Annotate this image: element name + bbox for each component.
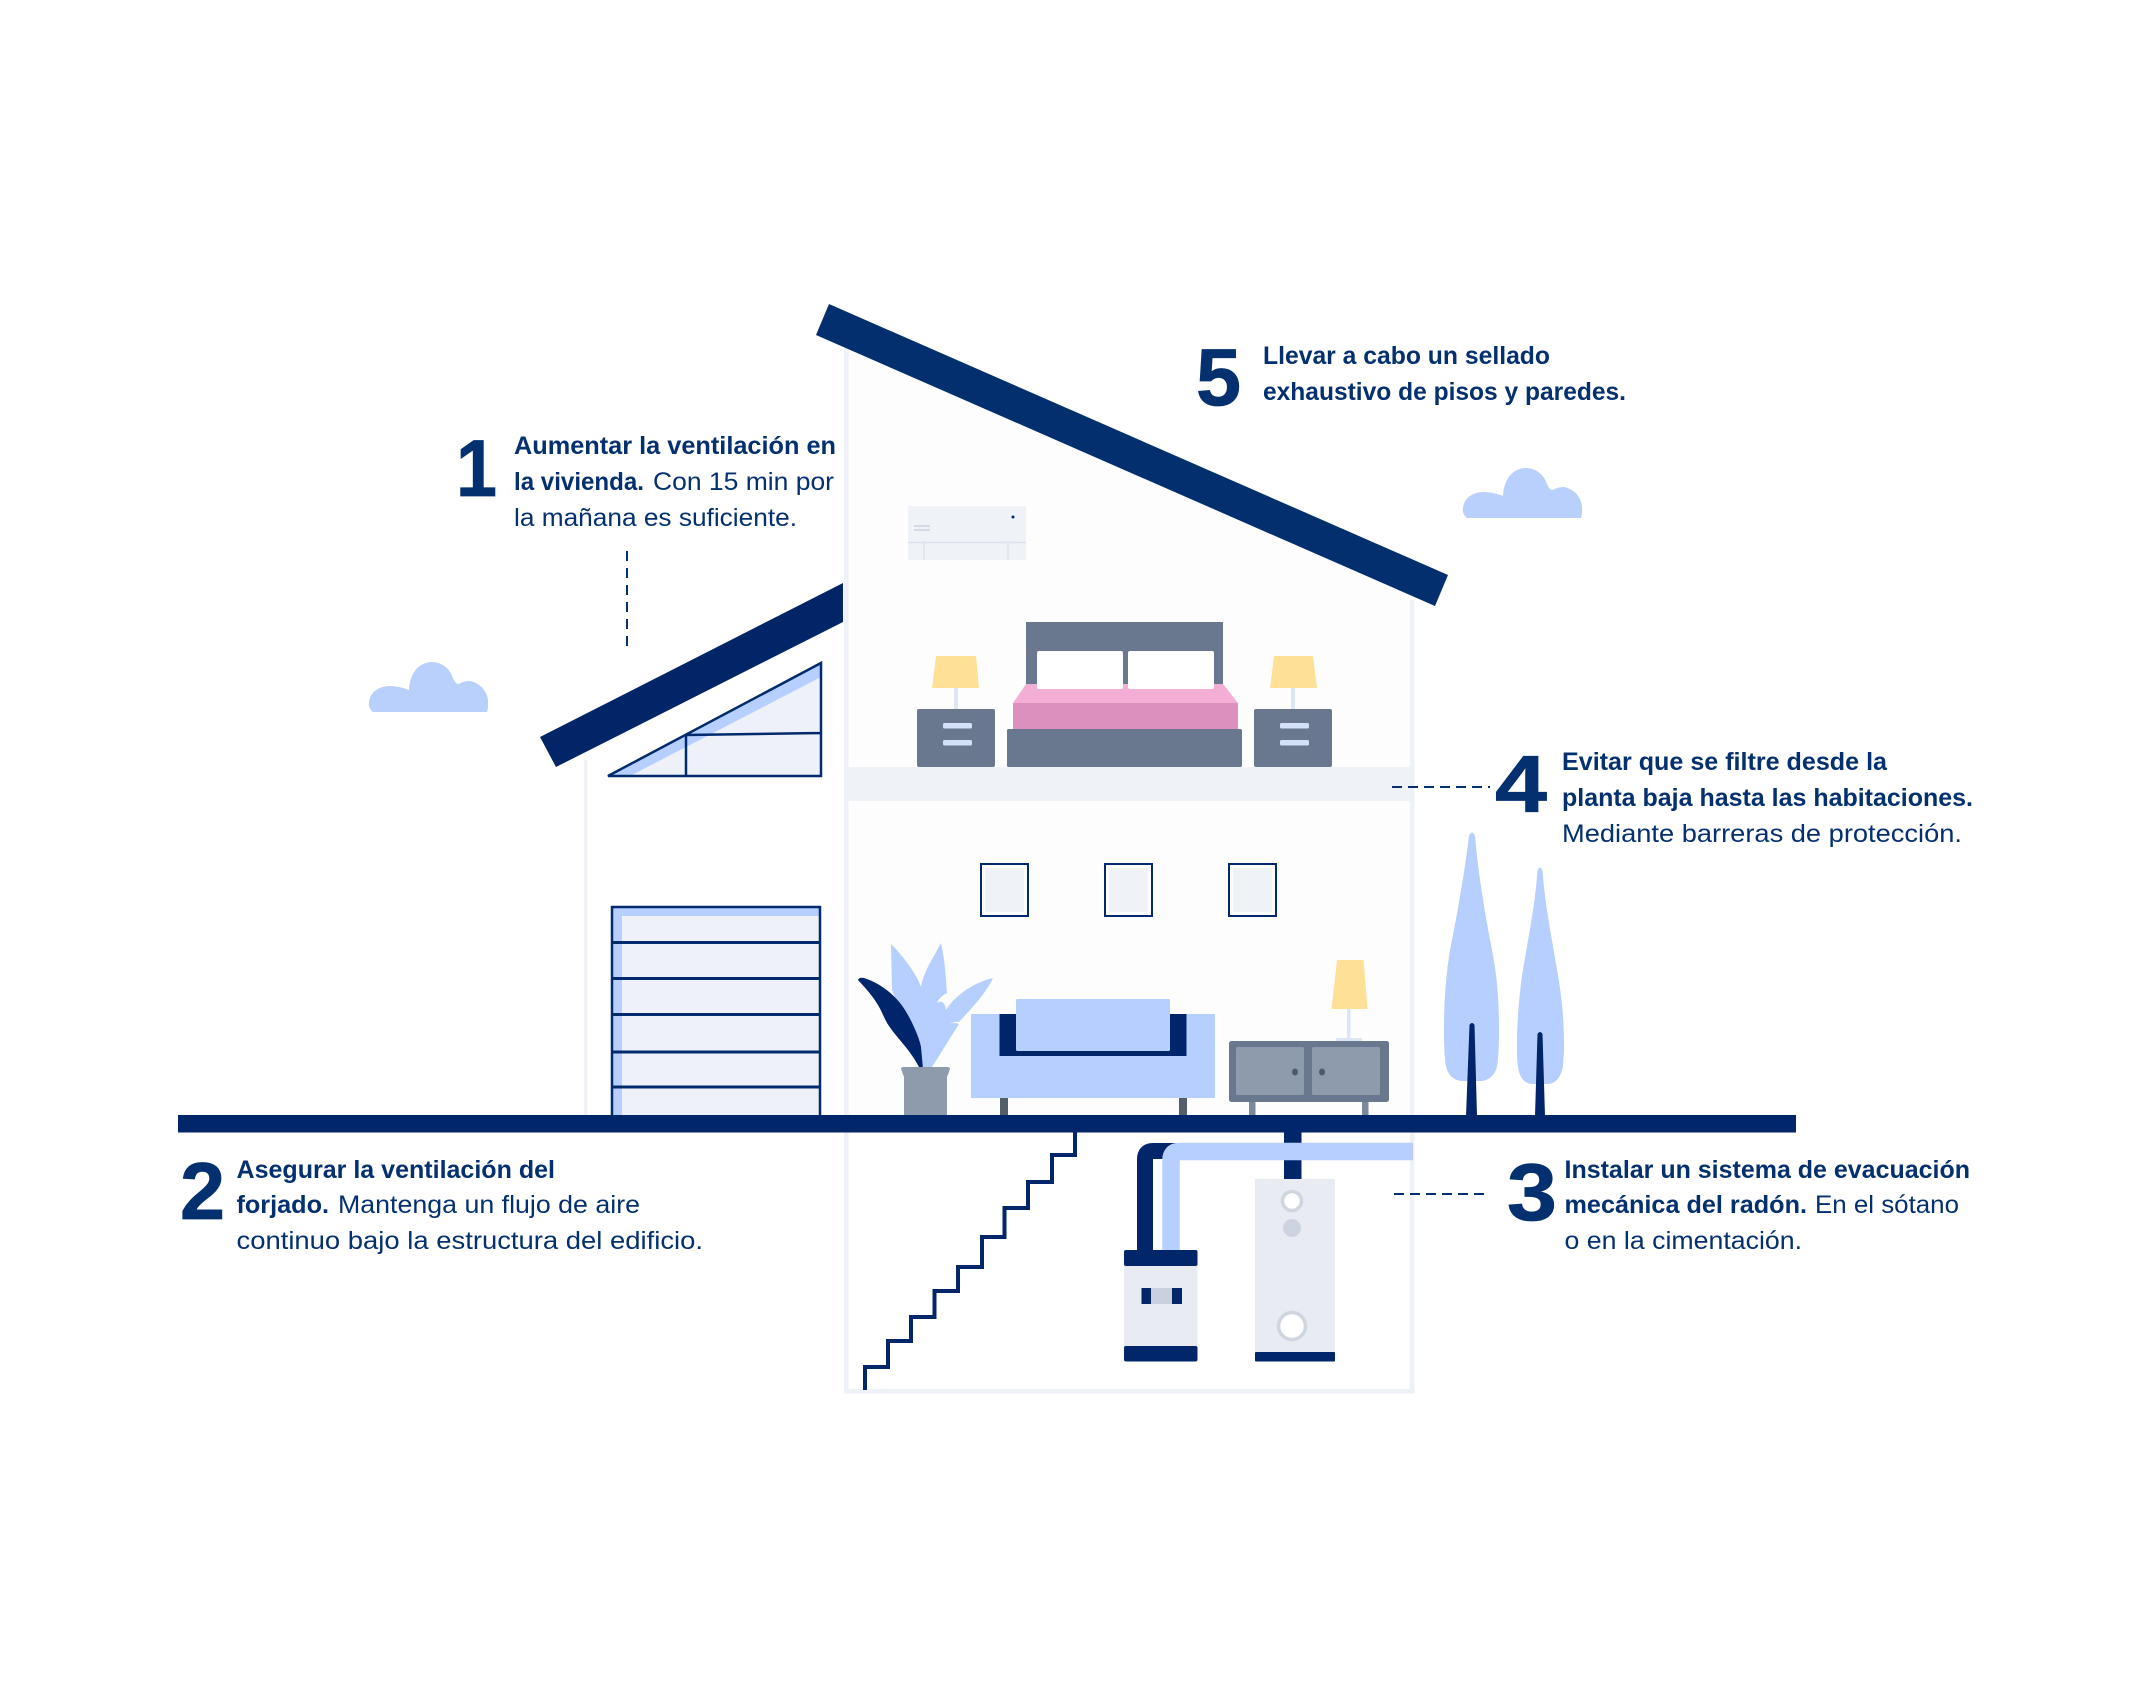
ground line bbox=[178, 1115, 1796, 1132]
sideboard with lamp bbox=[1229, 960, 1389, 1116]
garage door bbox=[611, 906, 821, 1116]
callout 1 bbox=[456, 424, 836, 532]
intermediate floor slab bbox=[848, 767, 1410, 801]
callout 4: 4 bbox=[1495, 740, 1547, 830]
right cloud bbox=[1463, 468, 1582, 518]
sofa bbox=[971, 999, 1215, 1116]
bed bbox=[1007, 622, 1242, 767]
house walls and interior bbox=[584, 345, 1414, 1394]
air conditioning unit bbox=[908, 506, 1026, 560]
wall picture 3 bbox=[1229, 864, 1276, 916]
callout 4: Evitar que se filtre desde la bbox=[1562, 748, 1888, 776]
callout 2: 2 bbox=[180, 1147, 225, 1237]
tree 1 bbox=[1444, 832, 1499, 1116]
dark exhaust stub pipe bbox=[1284, 1132, 1302, 1180]
basement stairs bbox=[865, 1132, 1075, 1390]
callout 5 bbox=[1196, 333, 1626, 423]
garage triangular window bbox=[608, 663, 821, 776]
left cloud bbox=[369, 662, 488, 712]
tree 2 bbox=[1517, 868, 1564, 1116]
callout 3 bbox=[1507, 1148, 1970, 1255]
water heater unit bbox=[1255, 1179, 1335, 1362]
callout 1: 1 bbox=[456, 424, 497, 514]
dashed leader line 4 bbox=[1392, 786, 1490, 788]
callout 5: Llevar a cabo un sellado bbox=[1263, 342, 1550, 370]
left nightstand and lamp bbox=[917, 656, 995, 767]
dashed leader line 1 bbox=[626, 551, 628, 652]
callout 3: En el sótano bbox=[1815, 1191, 1959, 1219]
callout 1: Aumentar la ventilación en bbox=[514, 432, 836, 460]
callout 1: Con 15 min por bbox=[653, 468, 834, 496]
main roof bbox=[816, 304, 1448, 606]
potted plant bbox=[858, 943, 993, 1115]
radon extraction unit bbox=[1124, 1250, 1198, 1362]
callout 1: la mañana es suficiente. bbox=[514, 504, 797, 532]
callout 2 bbox=[180, 1147, 703, 1255]
callout 3: Instalar un sistema de evacuación bbox=[1564, 1156, 1970, 1184]
callout 2: continuo bajo la estructura del edificio. bbox=[236, 1227, 703, 1255]
dashed leader line 3 bbox=[1394, 1193, 1490, 1195]
callout 4 bbox=[1495, 740, 1973, 848]
callout 5: exhaustivo de pisos y paredes. bbox=[1263, 378, 1626, 406]
callout 1: la vivienda. bbox=[514, 468, 644, 496]
callout 4: planta baja hasta las habitaciones. bbox=[1562, 784, 1973, 812]
dark radon pipe bbox=[1145, 1151, 1180, 1250]
callout 5: 5 bbox=[1196, 333, 1241, 423]
callout 3: mecánica del radón. bbox=[1564, 1191, 1807, 1219]
callout 2: forjado. bbox=[236, 1191, 329, 1219]
light air pipe bbox=[1171, 1152, 1413, 1250]
callout 3: o en la cimentación. bbox=[1564, 1227, 1802, 1255]
callout 4: Mediante barreras de protección. bbox=[1562, 820, 1962, 848]
callout 2: Mantenga un flujo de aire bbox=[338, 1191, 640, 1219]
callout 2: Asegurar la ventilación del bbox=[236, 1156, 555, 1184]
garage roof bbox=[540, 583, 843, 767]
wall picture 2 bbox=[1105, 864, 1152, 916]
right nightstand and lamp bbox=[1254, 656, 1332, 767]
callout 3: 3 bbox=[1507, 1148, 1557, 1238]
wall picture 1 bbox=[981, 864, 1028, 916]
